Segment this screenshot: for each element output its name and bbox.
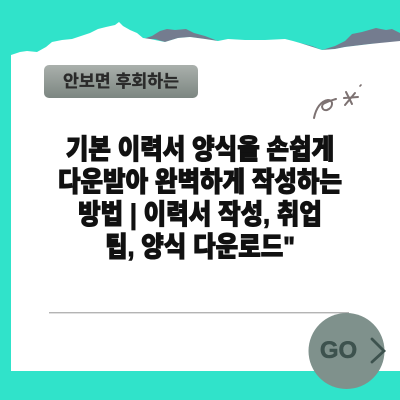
title: 기본 이력서 양식을 손쉽게 xyxy=(66,135,334,165)
GO circle xyxy=(308,313,384,389)
scribble icon xyxy=(314,85,361,118)
title: 다운받아 완벽하게 작성하는 xyxy=(58,167,342,197)
chevron arrow xyxy=(372,339,384,362)
torn paper shadow: right grey fragment xyxy=(296,28,400,50)
title: 방법 | 이력서 작성, 취업 xyxy=(78,200,322,230)
title: 팁, 양식 다운로드" xyxy=(105,232,295,262)
title xyxy=(58,134,342,262)
torn paper shadow: left grey fragment xyxy=(143,29,218,42)
GO button xyxy=(308,313,384,389)
GO label: GO xyxy=(320,337,357,364)
divider line xyxy=(49,312,349,313)
tag button: 안보면 후회하는 xyxy=(63,71,179,91)
tag button xyxy=(44,65,198,98)
